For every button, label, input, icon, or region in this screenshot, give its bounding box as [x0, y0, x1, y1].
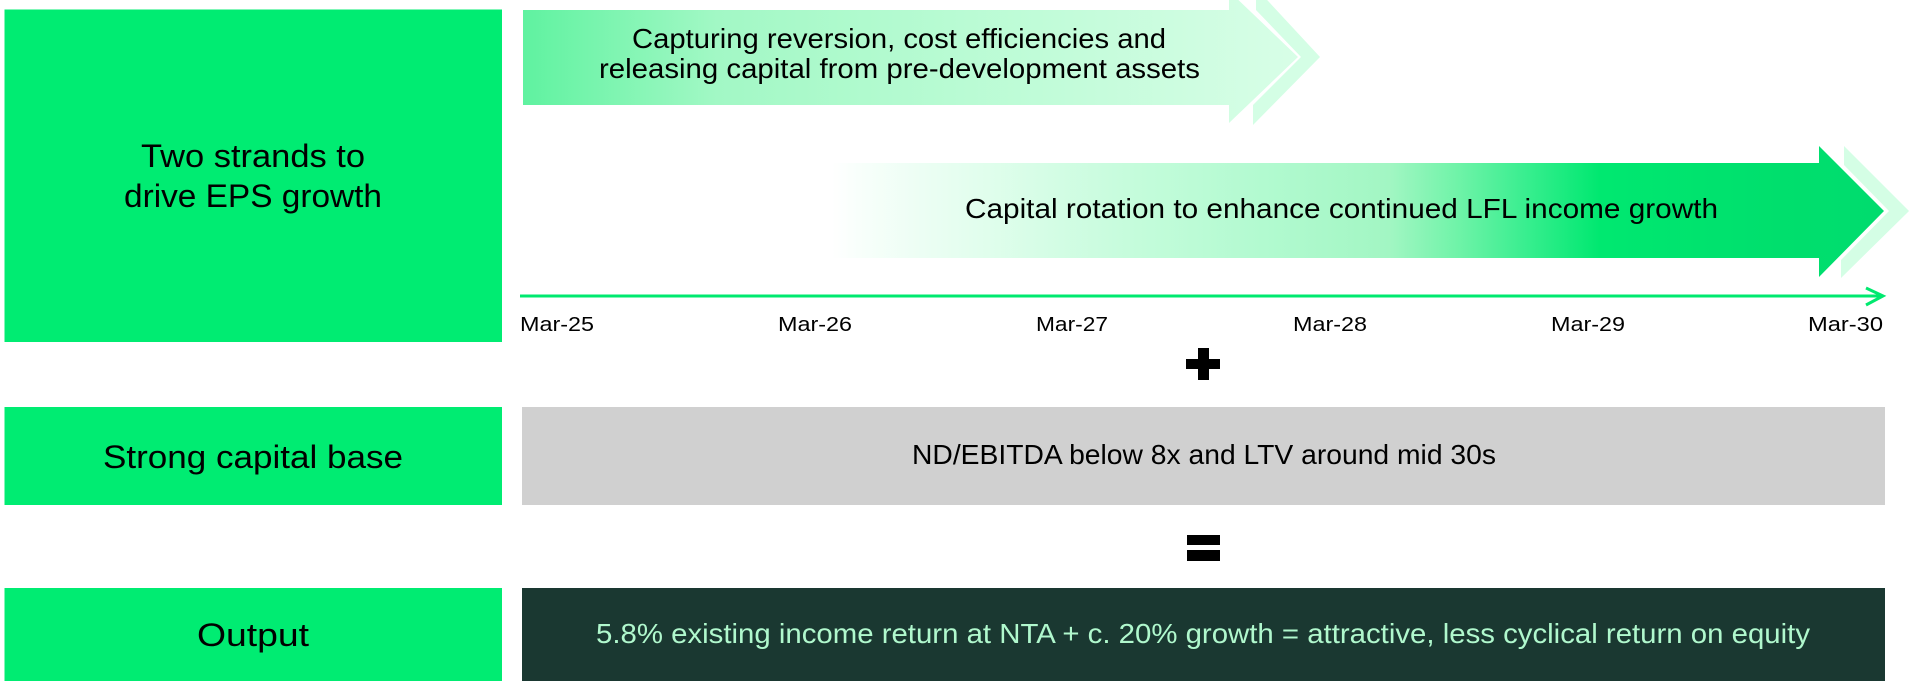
timeline labels: Mar-29: [1551, 314, 1625, 336]
panel: strong capital base label: [4, 407, 502, 505]
panel: capital base detail: ND/EBITDA below 8x and LTV around mid 30s: [912, 439, 1496, 470]
timeline labels: Mar-25: [520, 314, 594, 336]
panel: output detail: [522, 588, 1885, 681]
timeline labels: Mar-27: [1036, 314, 1108, 336]
panel: strong capital base label: Strong capital base: [103, 439, 403, 475]
arrow: capturing reversion: [523, 0, 1320, 125]
panel: two strands label: [4, 10, 502, 342]
panel: output label: [4, 588, 502, 681]
timeline labels: Mar-28: [1293, 314, 1367, 336]
text: capturing reversion: releasing capital from pre-development assets: [599, 53, 1200, 84]
icon: chevron lower arrow: [1841, 146, 1909, 278]
panel: capital base detail: [522, 407, 1885, 505]
heading: two strands to drive EPS growth: Two strands to: [141, 138, 365, 174]
heading: two strands to drive EPS growth: drive EPS growth: [124, 178, 382, 214]
panel: output label: Output: [197, 617, 309, 653]
timeline labels: Mar-26: [778, 314, 852, 336]
icon: plus: [1186, 348, 1220, 380]
icon: equals: [1187, 535, 1220, 561]
timeline labels: [520, 314, 1883, 336]
icon: chevron top arrow: [1253, 0, 1320, 125]
heading: two strands to drive EPS growth: [124, 138, 382, 214]
text: capital rotation: Capital rotation to enhance continued LFL income growth: [965, 193, 1718, 224]
text: capturing reversion: Capturing reversion, cost efficiencies and: [632, 23, 1166, 54]
text: capturing reversion: [599, 23, 1200, 84]
arrow: capital rotation: [832, 146, 1909, 278]
timeline labels: Mar-30: [1808, 314, 1883, 336]
panel: output detail: 5.8% existing income return at NTA + c. 20% growth = attractive, less cyclical return on equity: [596, 618, 1810, 649]
timeline axis: [520, 288, 1883, 305]
